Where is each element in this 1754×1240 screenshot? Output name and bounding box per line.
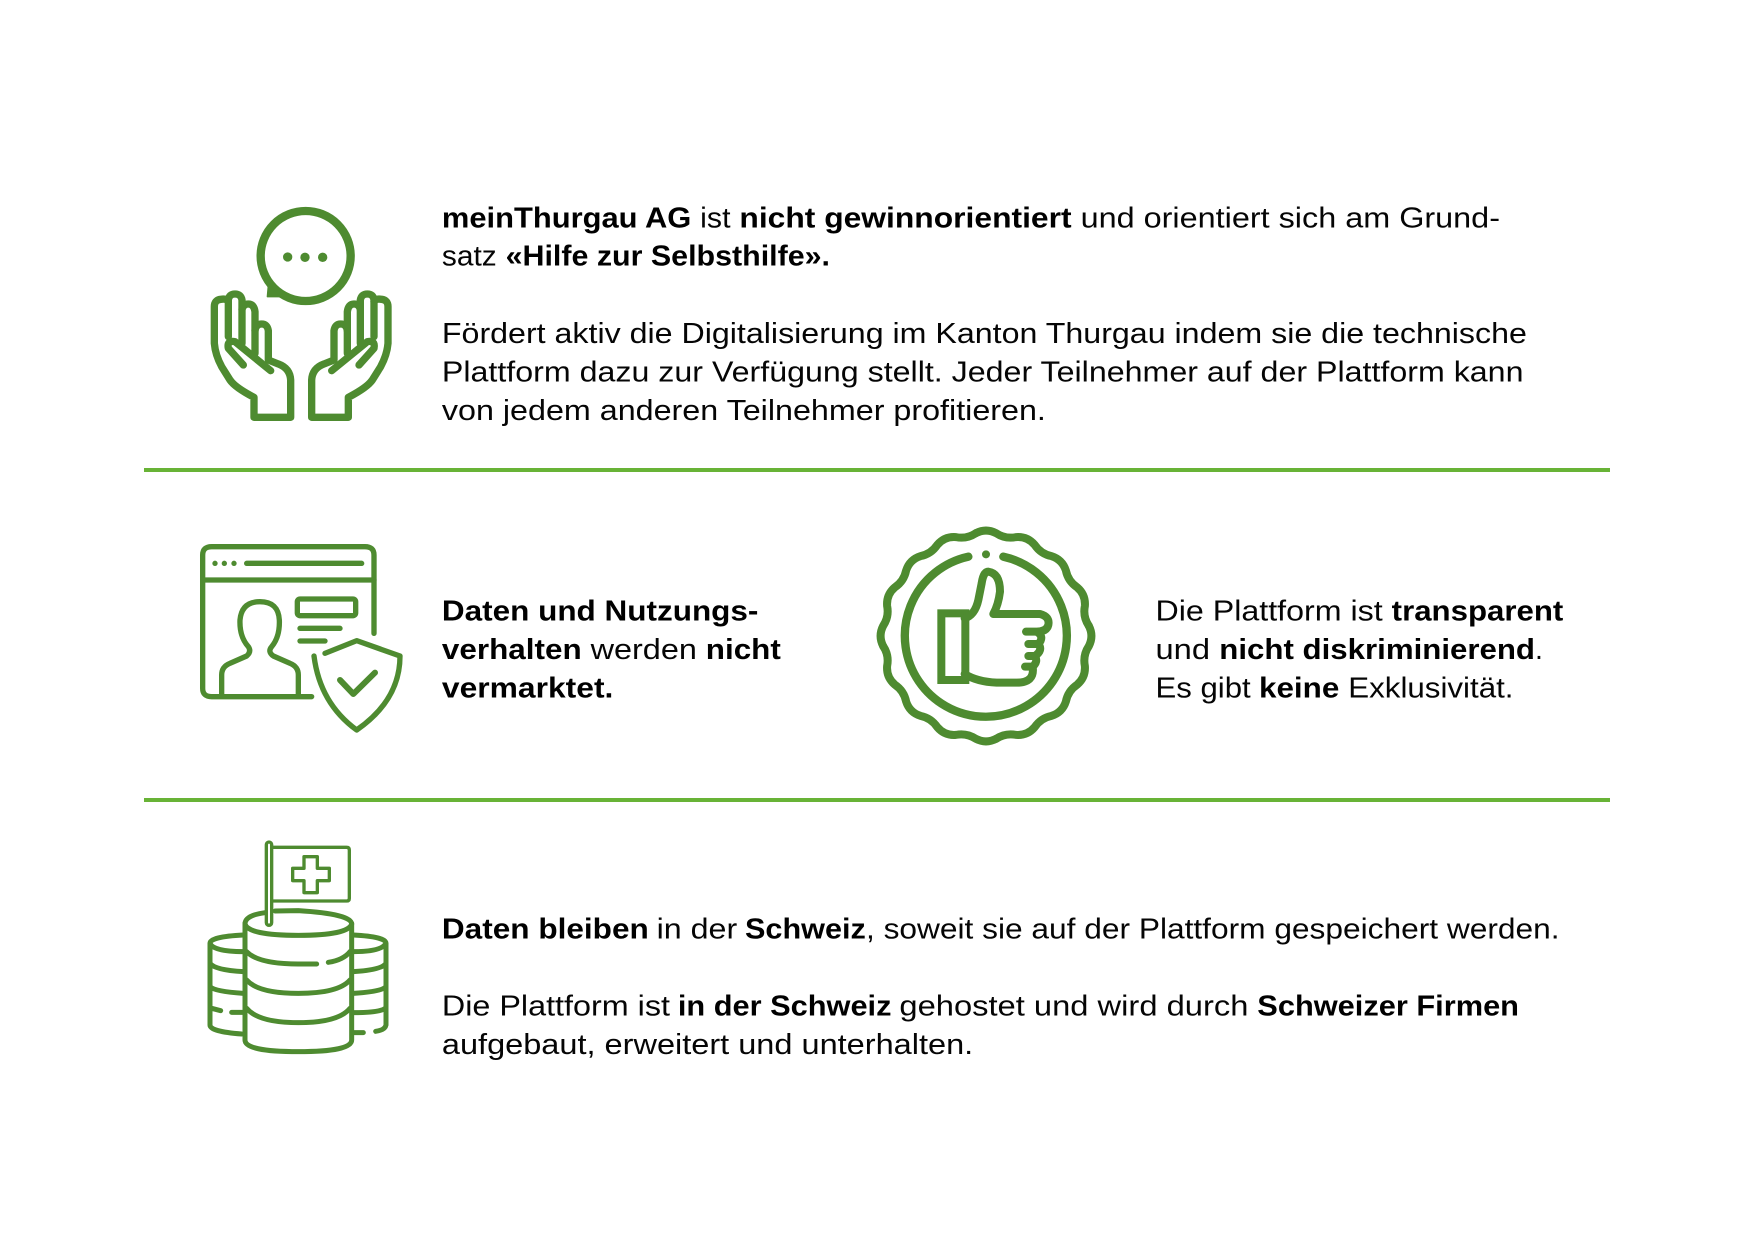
divider: bottom [144,798,1610,802]
line: data stays: in der [657,914,738,946]
line: hosted in Switzerland: gehostet und wird durch [899,990,1248,1022]
line: hosted in Switzerland: Die Plattform ist [442,990,670,1022]
line: data stays: , soweit sie auf der Plattform gespeichert werden. [866,914,1560,946]
paragraph: digitalisation: von jedem anderen Teilnehmer profitieren. [442,395,1046,427]
text block: data not marketed: nicht [706,634,781,666]
line: hosted in Switzerland: in der Schweiz [678,990,892,1022]
text block: transparent platform: . [1535,634,1543,666]
text block: transparent platform: Exklusivität. [1348,672,1514,704]
paragraph: digitalisation [442,318,1527,427]
line 1: meinThurgau AG [442,202,691,234]
line: built by: aufgebaut, erweitert und unterhalten. [442,1029,973,1061]
paragraph: digitalisation: Plattform dazu zur Verfügung stellt. Jeder Teilnehmer auf der Plattform kann [442,356,1523,388]
line 1: und orientiert sich am Grund- [1081,202,1500,234]
icon: thumbs up badge [881,531,1091,741]
text block: data not marketed: Daten und Nutzungs- [442,596,758,628]
icon: open hands with speech bubble [214,211,388,417]
paragraph: digitalisation: Fördert aktiv die Digitalisierung im Kanton Thurgau indem sie die technische [442,318,1527,350]
text block: data not marketed: vermarktet. [442,672,613,704]
line: hosted in Switzerland: Schweizer Firmen [1257,990,1519,1022]
text block: data not marketed: verhalten [442,634,582,666]
text block: transparent platform: keine [1259,672,1339,704]
text block: transparent platform: transparent [1392,596,1564,628]
icon: browser profile with shield [203,547,400,730]
line 1 [442,202,1500,234]
line: data stays [442,914,1559,946]
text block: transparent platform: Die Plattform ist [1156,596,1383,628]
divider: top [144,468,1610,472]
text block: transparent platform: Es gibt [1156,672,1251,704]
text block: not for profit [442,202,1527,427]
line: data stays: Daten bleiben [442,914,649,946]
text block: data stays in Switzerland [442,914,1559,1061]
line: data stays: Schweiz [745,914,866,946]
text block: transparent platform: nicht diskriminierend [1219,634,1535,666]
line: hosted in Switzerland [442,990,1519,1022]
text block: data not marketed: werden [589,634,697,666]
text block: transparent platform [1156,596,1564,704]
line 2: satz [442,240,497,272]
line 1: ist [700,202,731,234]
line 2: «Hilfe zur Selbsthilfe». [506,240,830,272]
line 1: nicht gewinnorientiert [739,202,1072,234]
text block: transparent platform: und [1156,634,1210,666]
text block: data not marketed [442,596,781,704]
icon: database stack with Swiss flag [210,842,386,1052]
